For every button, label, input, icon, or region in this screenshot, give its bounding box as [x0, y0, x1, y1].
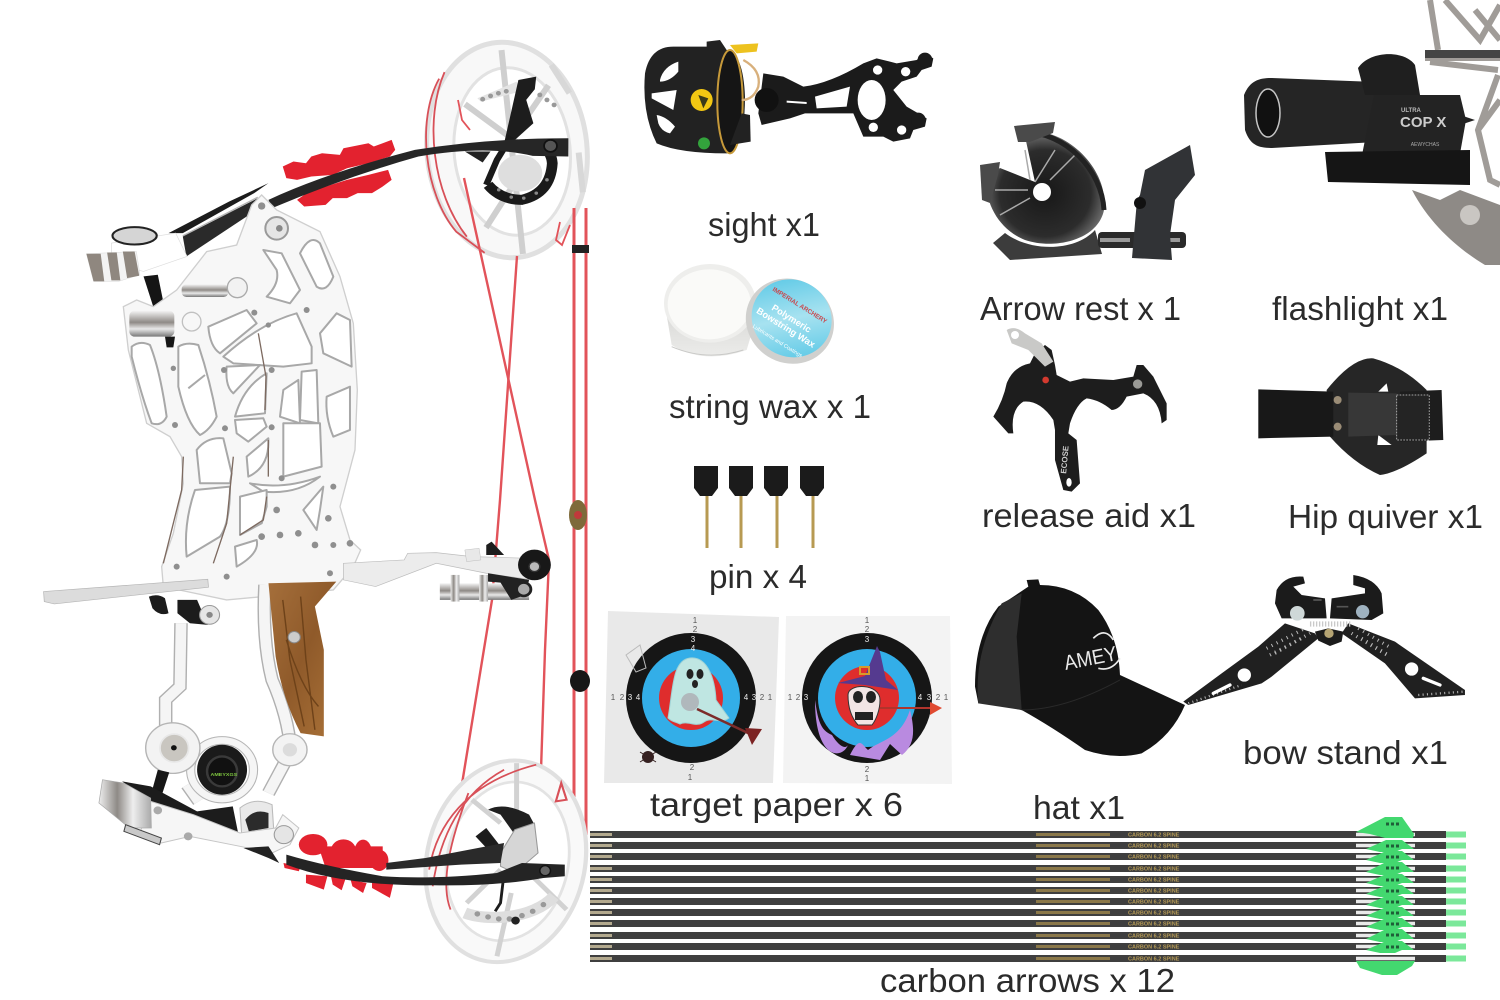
vane logos — [1386, 824, 1400, 947]
sight — [644, 40, 933, 153]
arrow labels: CARBON 6.2 SPINE — [1128, 854, 1180, 860]
fletching strips — [1356, 834, 1415, 958]
flashlight: ULTRA — [1401, 108, 1422, 114]
lower bracket — [99, 770, 299, 863]
target paper ghost: 2 — [620, 693, 625, 702]
arrow labels: CARBON 6.2 SPINE — [1128, 910, 1180, 916]
green vanes — [1356, 817, 1415, 975]
arrow labels: CARBON 6.2 SPINE — [1128, 844, 1180, 850]
logo stabilizer: AMEYXGS — [211, 772, 238, 778]
arrow rest label: Arrow rest x 1 — [980, 290, 1181, 327]
arrow labels: CARBON 6.2 SPINE — [1128, 900, 1180, 906]
arrow labels: CARBON 6.2 SPINE — [1128, 888, 1180, 894]
target paper skull: 2 — [936, 693, 941, 702]
hat — [975, 579, 1185, 756]
target paper ghost: 1 — [688, 773, 693, 782]
target paper skull: 1 — [788, 693, 793, 702]
target paper ghost: 4 — [636, 693, 641, 702]
release aid label: release aid x1 — [982, 497, 1196, 534]
bottom limb dampers — [283, 834, 393, 898]
top limb — [169, 138, 568, 256]
target paper skull: 2 — [796, 693, 801, 702]
target paper skull: 1 — [944, 693, 949, 702]
target paper ghost — [604, 611, 779, 783]
target paper ghost: 2 — [760, 693, 765, 702]
arrow labels: CARBON 6.2 SPINE — [1128, 832, 1180, 838]
target paper skull: 2 — [865, 625, 870, 634]
hat: AMEY — [1062, 642, 1119, 675]
target paper ghost: 4 — [691, 644, 696, 653]
arrow labels: CARBON 6.2 SPINE — [1128, 956, 1180, 962]
string servings — [569, 245, 590, 692]
string wax tin: IMPERIAL ARCHERY — [771, 286, 829, 326]
target paper ghost: 3 — [628, 693, 633, 702]
target paper skull: 3 — [804, 693, 809, 702]
target paper ghost: 1 — [693, 616, 698, 625]
hat label: hat x1 — [1033, 789, 1125, 826]
target paper ghost: 3 — [752, 693, 757, 702]
target paper ghost: 1 — [611, 693, 616, 702]
arrow labels: CARBON 6.2 SPINE — [1128, 922, 1180, 928]
arrow labels — [1128, 832, 1180, 962]
hip quiver label: Hip quiver x1 — [1288, 498, 1483, 535]
flashlight: AEWYCHAS — [1411, 142, 1440, 148]
bow stand — [1183, 575, 1465, 705]
top cam hardware — [465, 77, 554, 200]
flashlight: COP X — [1400, 114, 1446, 131]
top limb dampers — [283, 140, 395, 206]
grip — [268, 582, 336, 736]
target paper ghost: 3 — [691, 635, 696, 644]
riser web — [123, 195, 361, 600]
string wax label: string wax x 1 — [669, 388, 871, 425]
arrow rest — [980, 122, 1195, 260]
release aid: ECOSE — [1059, 445, 1071, 474]
target paper ghost: 1 — [768, 693, 773, 702]
top bracket — [86, 227, 187, 310]
bow stand label: bow stand x1 — [1243, 734, 1448, 771]
bow frame behind flashlight — [1425, 0, 1500, 185]
target paper ghost: 2 — [693, 625, 698, 634]
flashlight label: flashlight x1 — [1272, 290, 1448, 327]
target paper skull — [783, 616, 952, 784]
target paper ghost: 2 — [690, 763, 695, 772]
arrow tips — [590, 834, 612, 958]
carbon arrows — [590, 817, 1466, 975]
arrow labels: CARBON 6.2 SPINE — [1128, 878, 1180, 884]
arrow labels: CARBON 6.2 SPINE — [1128, 944, 1180, 950]
string wax tin — [664, 262, 850, 380]
release aid — [993, 328, 1167, 492]
target paper label: target paper x 6 — [650, 786, 903, 823]
bottom cam wheel — [409, 748, 603, 974]
pins label: pin x 4 — [709, 558, 807, 595]
string wax tin: Bowstring Wax — [755, 306, 818, 350]
compound bow — [44, 34, 603, 974]
arrow labels: CARBON 6.2 SPINE — [1128, 866, 1180, 872]
target paper skull: 1 — [865, 774, 870, 783]
stabilizer arm — [343, 542, 551, 602]
lower riser frame — [146, 585, 307, 801]
target paper ghost: 4 — [744, 693, 749, 702]
string wax tin: Lubricants and Coatings — [751, 324, 803, 359]
pins — [694, 466, 824, 548]
target paper skull: 2 — [865, 765, 870, 774]
top limb group — [86, 77, 568, 310]
string wax tin: Polymeric — [770, 303, 813, 335]
arrow rail — [44, 579, 209, 604]
target paper skull: 3 — [865, 635, 870, 644]
hip quiver — [1258, 358, 1443, 475]
sight label: sight x1 — [708, 206, 820, 243]
arrow labels: CARBON 6.2 SPINE — [1128, 934, 1180, 940]
bottom limb — [286, 843, 565, 885]
logo stabilizer — [197, 745, 247, 795]
carbon arrows label: carbon arrows x 12 — [880, 962, 1175, 999]
target paper skull: 4 — [918, 693, 923, 702]
target paper skull: 3 — [927, 693, 932, 702]
target paper skull: 1 — [865, 616, 870, 625]
lower frame group — [44, 542, 603, 974]
arrow shafts — [590, 831, 1446, 962]
flashlight — [1244, 0, 1500, 265]
top cam wheel — [416, 34, 598, 266]
arrow nocks — [1446, 834, 1466, 958]
red bowstrings — [458, 100, 586, 835]
